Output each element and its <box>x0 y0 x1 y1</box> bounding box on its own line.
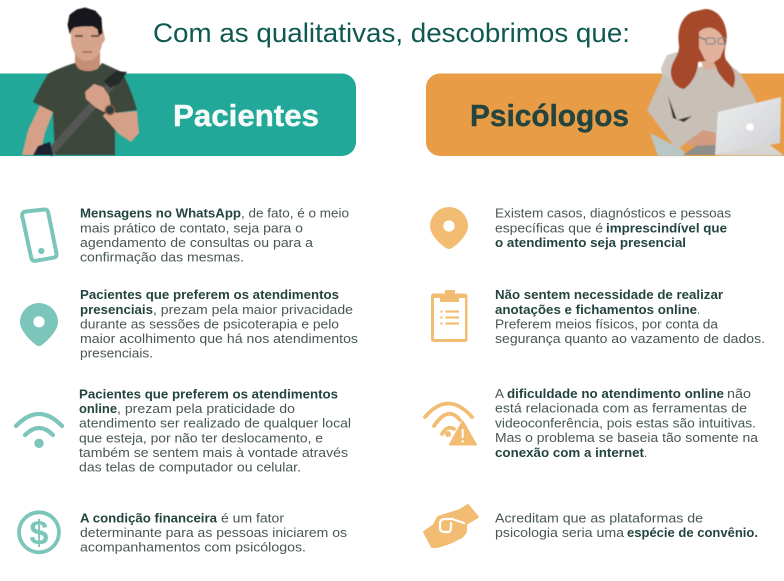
text: atendimento presencial: Existem casos, diagnósticos e pessoas <box>495 206 731 221</box>
text: online: também se sentem mais à vontade através <box>79 445 348 460</box>
text: WhatsApp: confirmação das mesmas. <box>80 250 244 265</box>
icon: clipboard <box>431 290 468 342</box>
text: condição financeira <box>80 510 347 555</box>
icon: location pin <box>430 207 468 249</box>
text: online: que esteja, por não ter deslocamento, e <box>79 430 323 445</box>
text: WhatsApp <box>80 206 349 265</box>
heading: Psicólogos: Psicólogos <box>470 98 629 133</box>
text: online: Pacientes que preferem os atendimentos <box>79 386 338 401</box>
text: anotações <box>495 287 765 346</box>
text: dificuldade online: A <box>495 386 504 401</box>
text: presenciais: , prezam pela maior privacidade <box>153 302 353 317</box>
text: dificuldade online <box>495 386 759 460</box>
text: condição financeira: acompanhamentos com psicólogos. <box>80 540 306 555</box>
text: online: , prezam pela praticidade do <box>117 401 295 416</box>
text: condição financeira: A condição financeira <box>80 510 218 525</box>
icon: dollar coin <box>19 512 59 552</box>
text: dificuldade online: videoconferência, pois estas são intuitivas. <box>495 415 756 430</box>
text: convênio: Acreditam que as plataformas de <box>495 510 703 525</box>
text: presenciais: presenciais <box>80 302 153 317</box>
text: WhatsApp: , de fato, é o meio <box>241 206 349 221</box>
text: presenciais: presenciais. <box>80 346 153 361</box>
text: anotações: anotações e fichamentos online <box>495 302 697 317</box>
icon: dollar coin: $ <box>30 514 49 552</box>
item: convênio <box>424 505 758 547</box>
item: condição financeira <box>19 510 347 555</box>
item: atendimento presencial <box>430 206 731 250</box>
text: condição financeira: determinante para as pessoas iniciarem os <box>80 525 347 540</box>
text: anotações: segurança quanto ao vazamento de dados. <box>495 331 765 346</box>
title: Com as qualitativas, descobrimos que: <box>153 18 630 48</box>
icon: wifi <box>16 414 62 448</box>
text: online: atendimento ser realizado de qualquer local <box>79 416 351 431</box>
text: atendimento presencial: o atendimento seja presencial <box>495 235 686 250</box>
photo: man with shoulder bag <box>22 8 139 155</box>
text: dificuldade online: dificuldade no atendimento online <box>507 386 724 401</box>
icon: phone <box>22 209 57 261</box>
heading: Pacientes: Pacientes <box>173 98 319 133</box>
text: WhatsApp: mais prático de contato, seja para o <box>80 220 303 236</box>
icon: location pin <box>20 303 58 346</box>
panel: pacientes findings <box>16 206 358 555</box>
panel: psicólogos findings <box>424 206 765 547</box>
text: WhatsApp: Mensagens no WhatsApp <box>80 206 241 221</box>
text: dificuldade online: . <box>644 445 647 460</box>
text: atendimento presencial: específicas que é <box>495 220 603 236</box>
text: anotações: Não sentem necessidade de realizar <box>495 287 723 302</box>
text: atendimento presencial: imprescindível que <box>606 220 727 236</box>
photo: woman with laptop <box>647 9 784 156</box>
text: dificuldade online: Mas o problema se baseia tão somente na <box>495 430 759 445</box>
text: convênio: espécie de convênio. <box>627 525 758 540</box>
text: anotações: . <box>697 302 700 317</box>
text: convênio: psicologia seria uma <box>495 525 625 540</box>
text: WhatsApp: agendamento de consultas ou para a <box>80 235 314 250</box>
text: atendimento presencial <box>495 206 731 250</box>
icon: laptop logo <box>746 123 754 131</box>
icon: handshake <box>424 505 478 547</box>
banner: Psicólogos <box>426 74 784 156</box>
item: dificuldade online <box>425 386 759 460</box>
text: online: das telas de computador ou celular. <box>79 460 301 475</box>
text: convênio <box>495 510 758 540</box>
text: dificuldade online: conexão com a internet <box>495 445 645 460</box>
item: presenciais <box>20 287 358 361</box>
text: dificuldade online: não <box>727 386 751 401</box>
text: presenciais <box>80 287 358 361</box>
banner: Pacientes <box>0 74 356 156</box>
item: online <box>16 386 351 475</box>
item: anotações <box>431 287 765 346</box>
item: WhatsApp <box>22 206 349 265</box>
text: online <box>79 386 351 475</box>
text: condição financeira: é um fator <box>221 510 285 525</box>
text: online: online <box>79 401 117 416</box>
text: presenciais: durante as sessões de psicoterapia e pelo <box>80 316 339 332</box>
text: anotações: Preferem meios físicos, por conta da <box>495 316 719 332</box>
icon: wifi warning <box>425 404 477 446</box>
text: presenciais: Pacientes que preferem os atendimentos <box>80 287 339 302</box>
text: dificuldade online: está relacionada com as ferramentas de <box>495 401 747 416</box>
text: presenciais: maior acolhimento que há nos atendimentos <box>80 331 358 346</box>
